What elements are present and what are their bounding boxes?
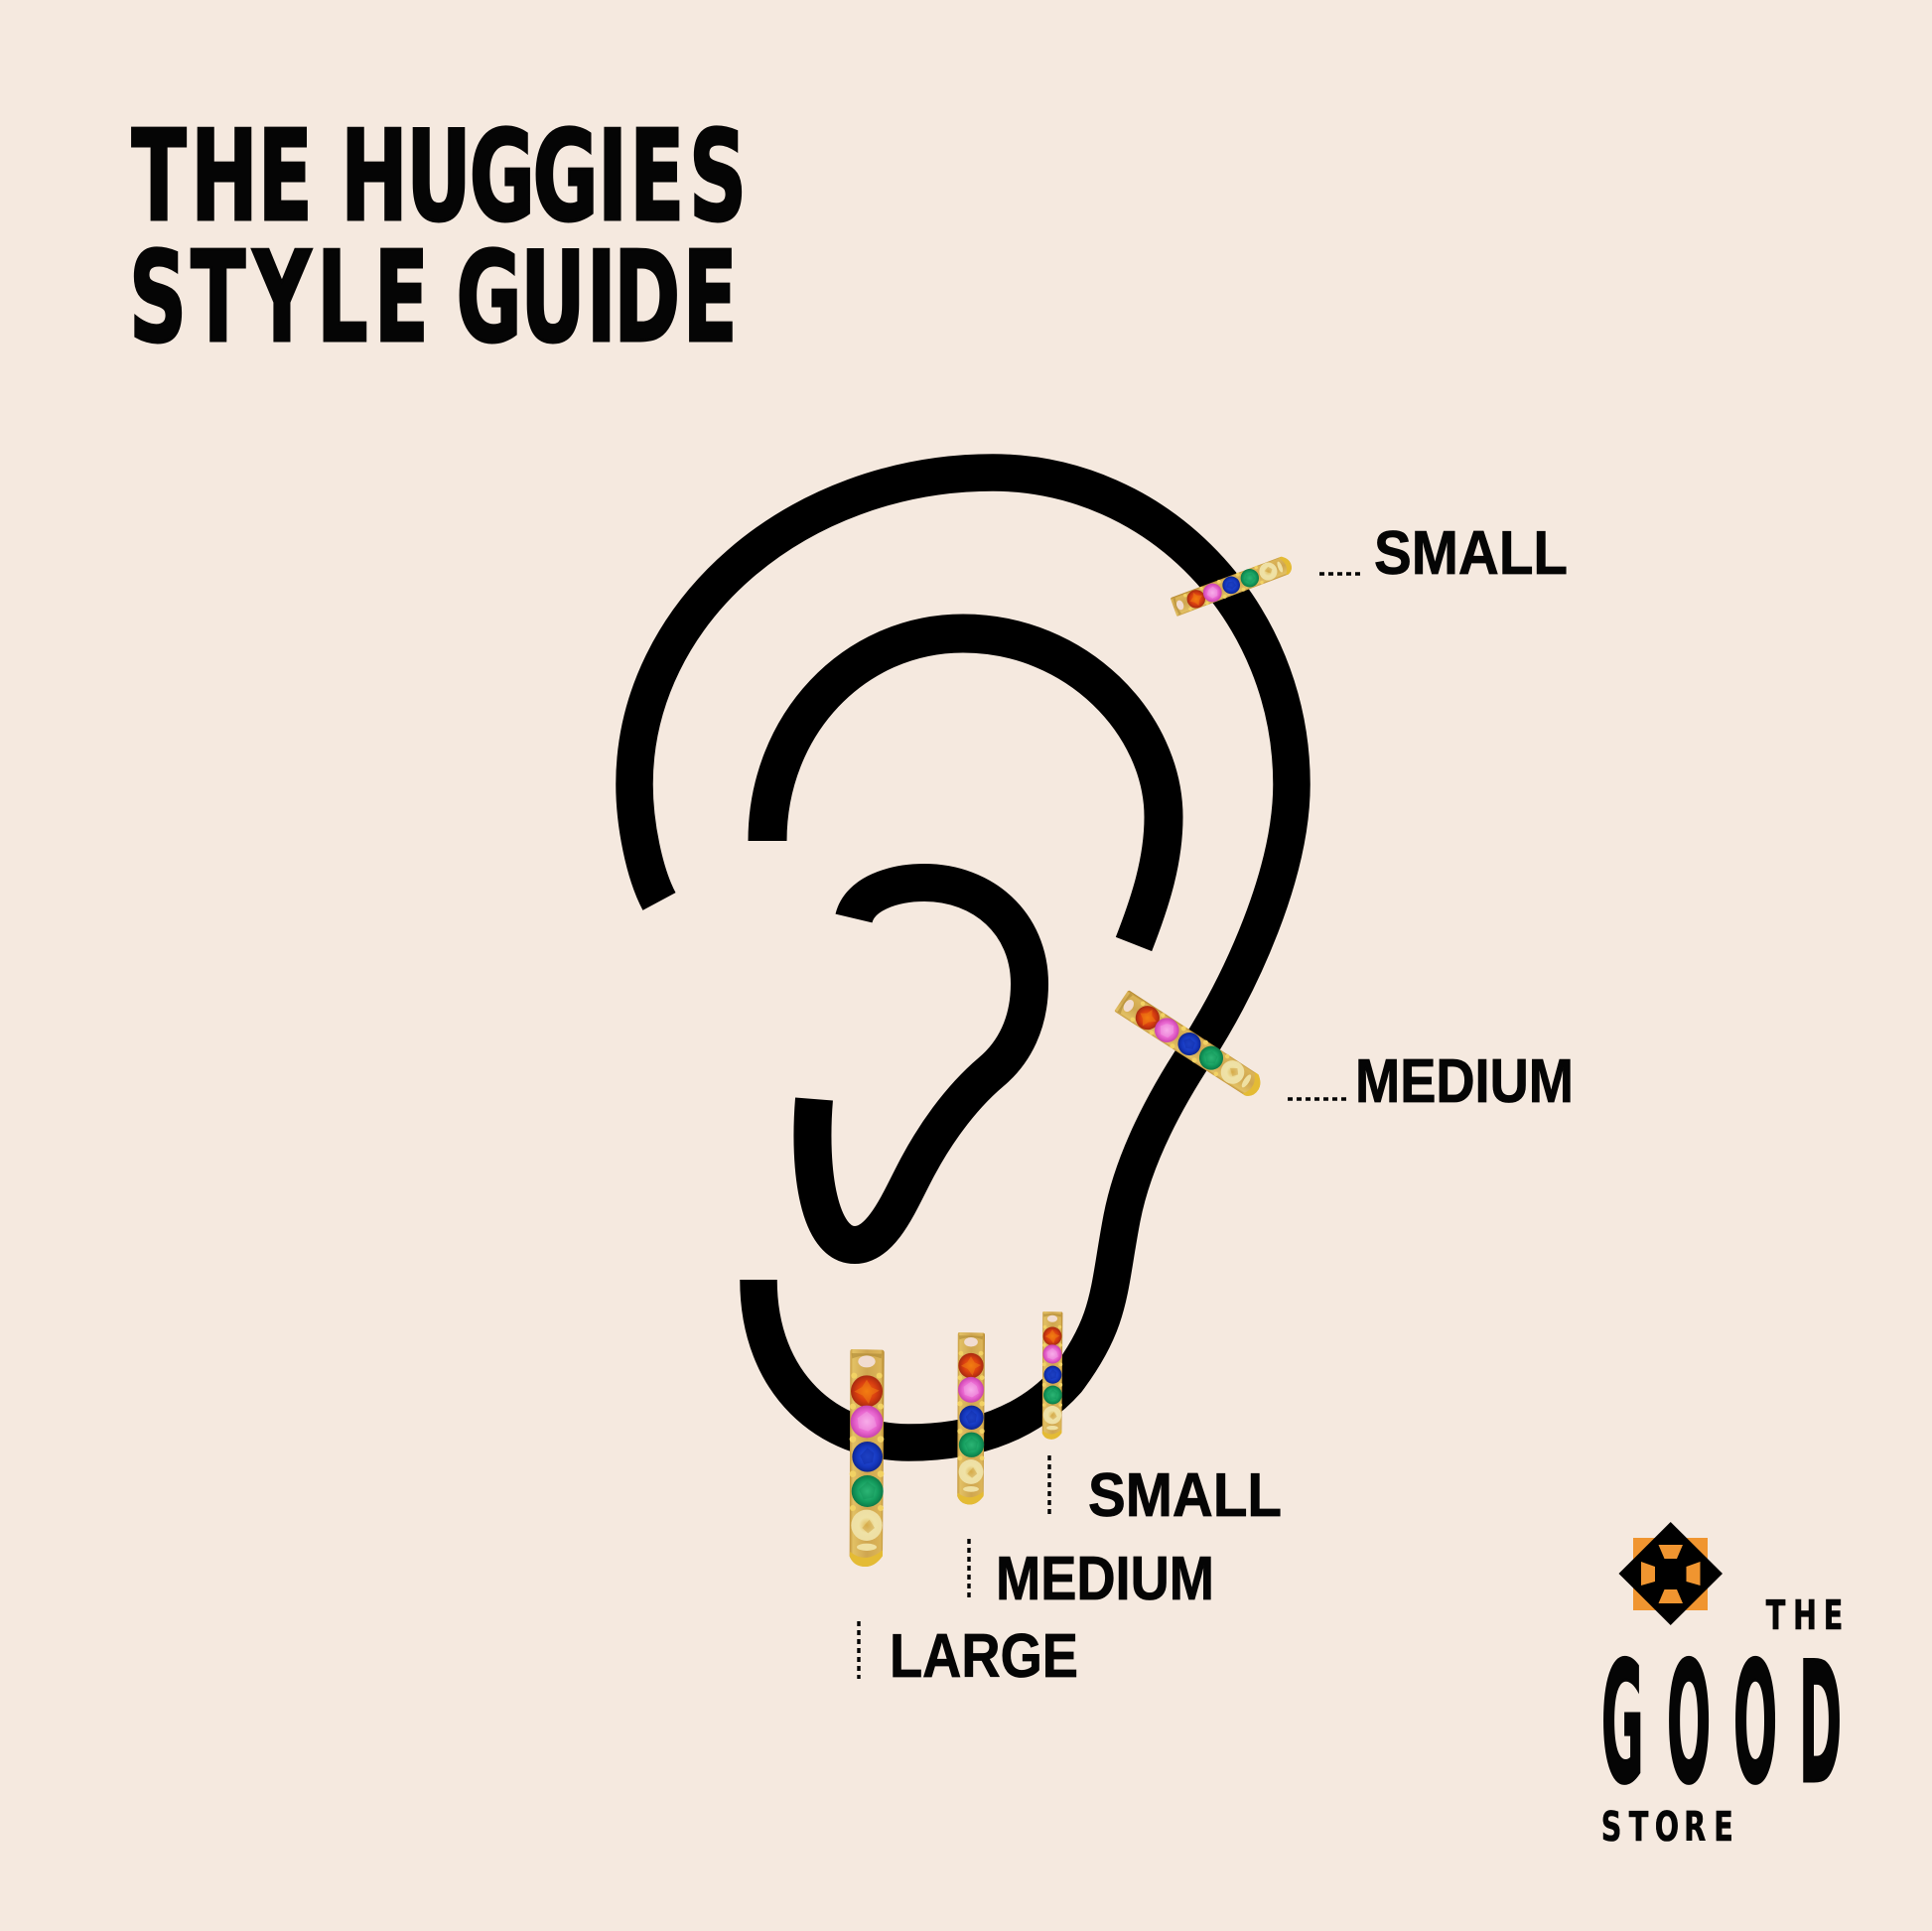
logo: The Good Store [1601,1522,1843,1851]
label: large lobe: LARGE [890,1622,1078,1691]
title: STYLE GUIDE [129,224,738,370]
ear canal curve [812,883,1030,1245]
logo word: THE: THE [1766,1592,1843,1639]
label: medium lobe: MEDIUM [996,1545,1214,1613]
logo icon [1618,1522,1723,1625]
logo word: GOOD: GOOD [1601,1628,1842,1822]
ear illustration [634,473,1292,1443]
hoop: small on lobe [1042,1311,1062,1440]
label: small upper: SMALL [1374,519,1568,588]
ear inner fold [767,633,1164,944]
logo word: STORE: STORE [1601,1804,1733,1851]
label: medium mid: MEDIUM [1355,1047,1574,1116]
hoop: medium on lobe [957,1332,985,1504]
hoop: medium on mid ear [1114,990,1266,1100]
title [129,103,747,370]
title: THE HUGGIES [132,103,747,249]
label: small lobe: SMALL [1088,1461,1282,1530]
hoop: small on upper ear [1170,553,1294,617]
ear outer contour [634,473,1292,1443]
hoop: large on lobe [850,1349,885,1567]
